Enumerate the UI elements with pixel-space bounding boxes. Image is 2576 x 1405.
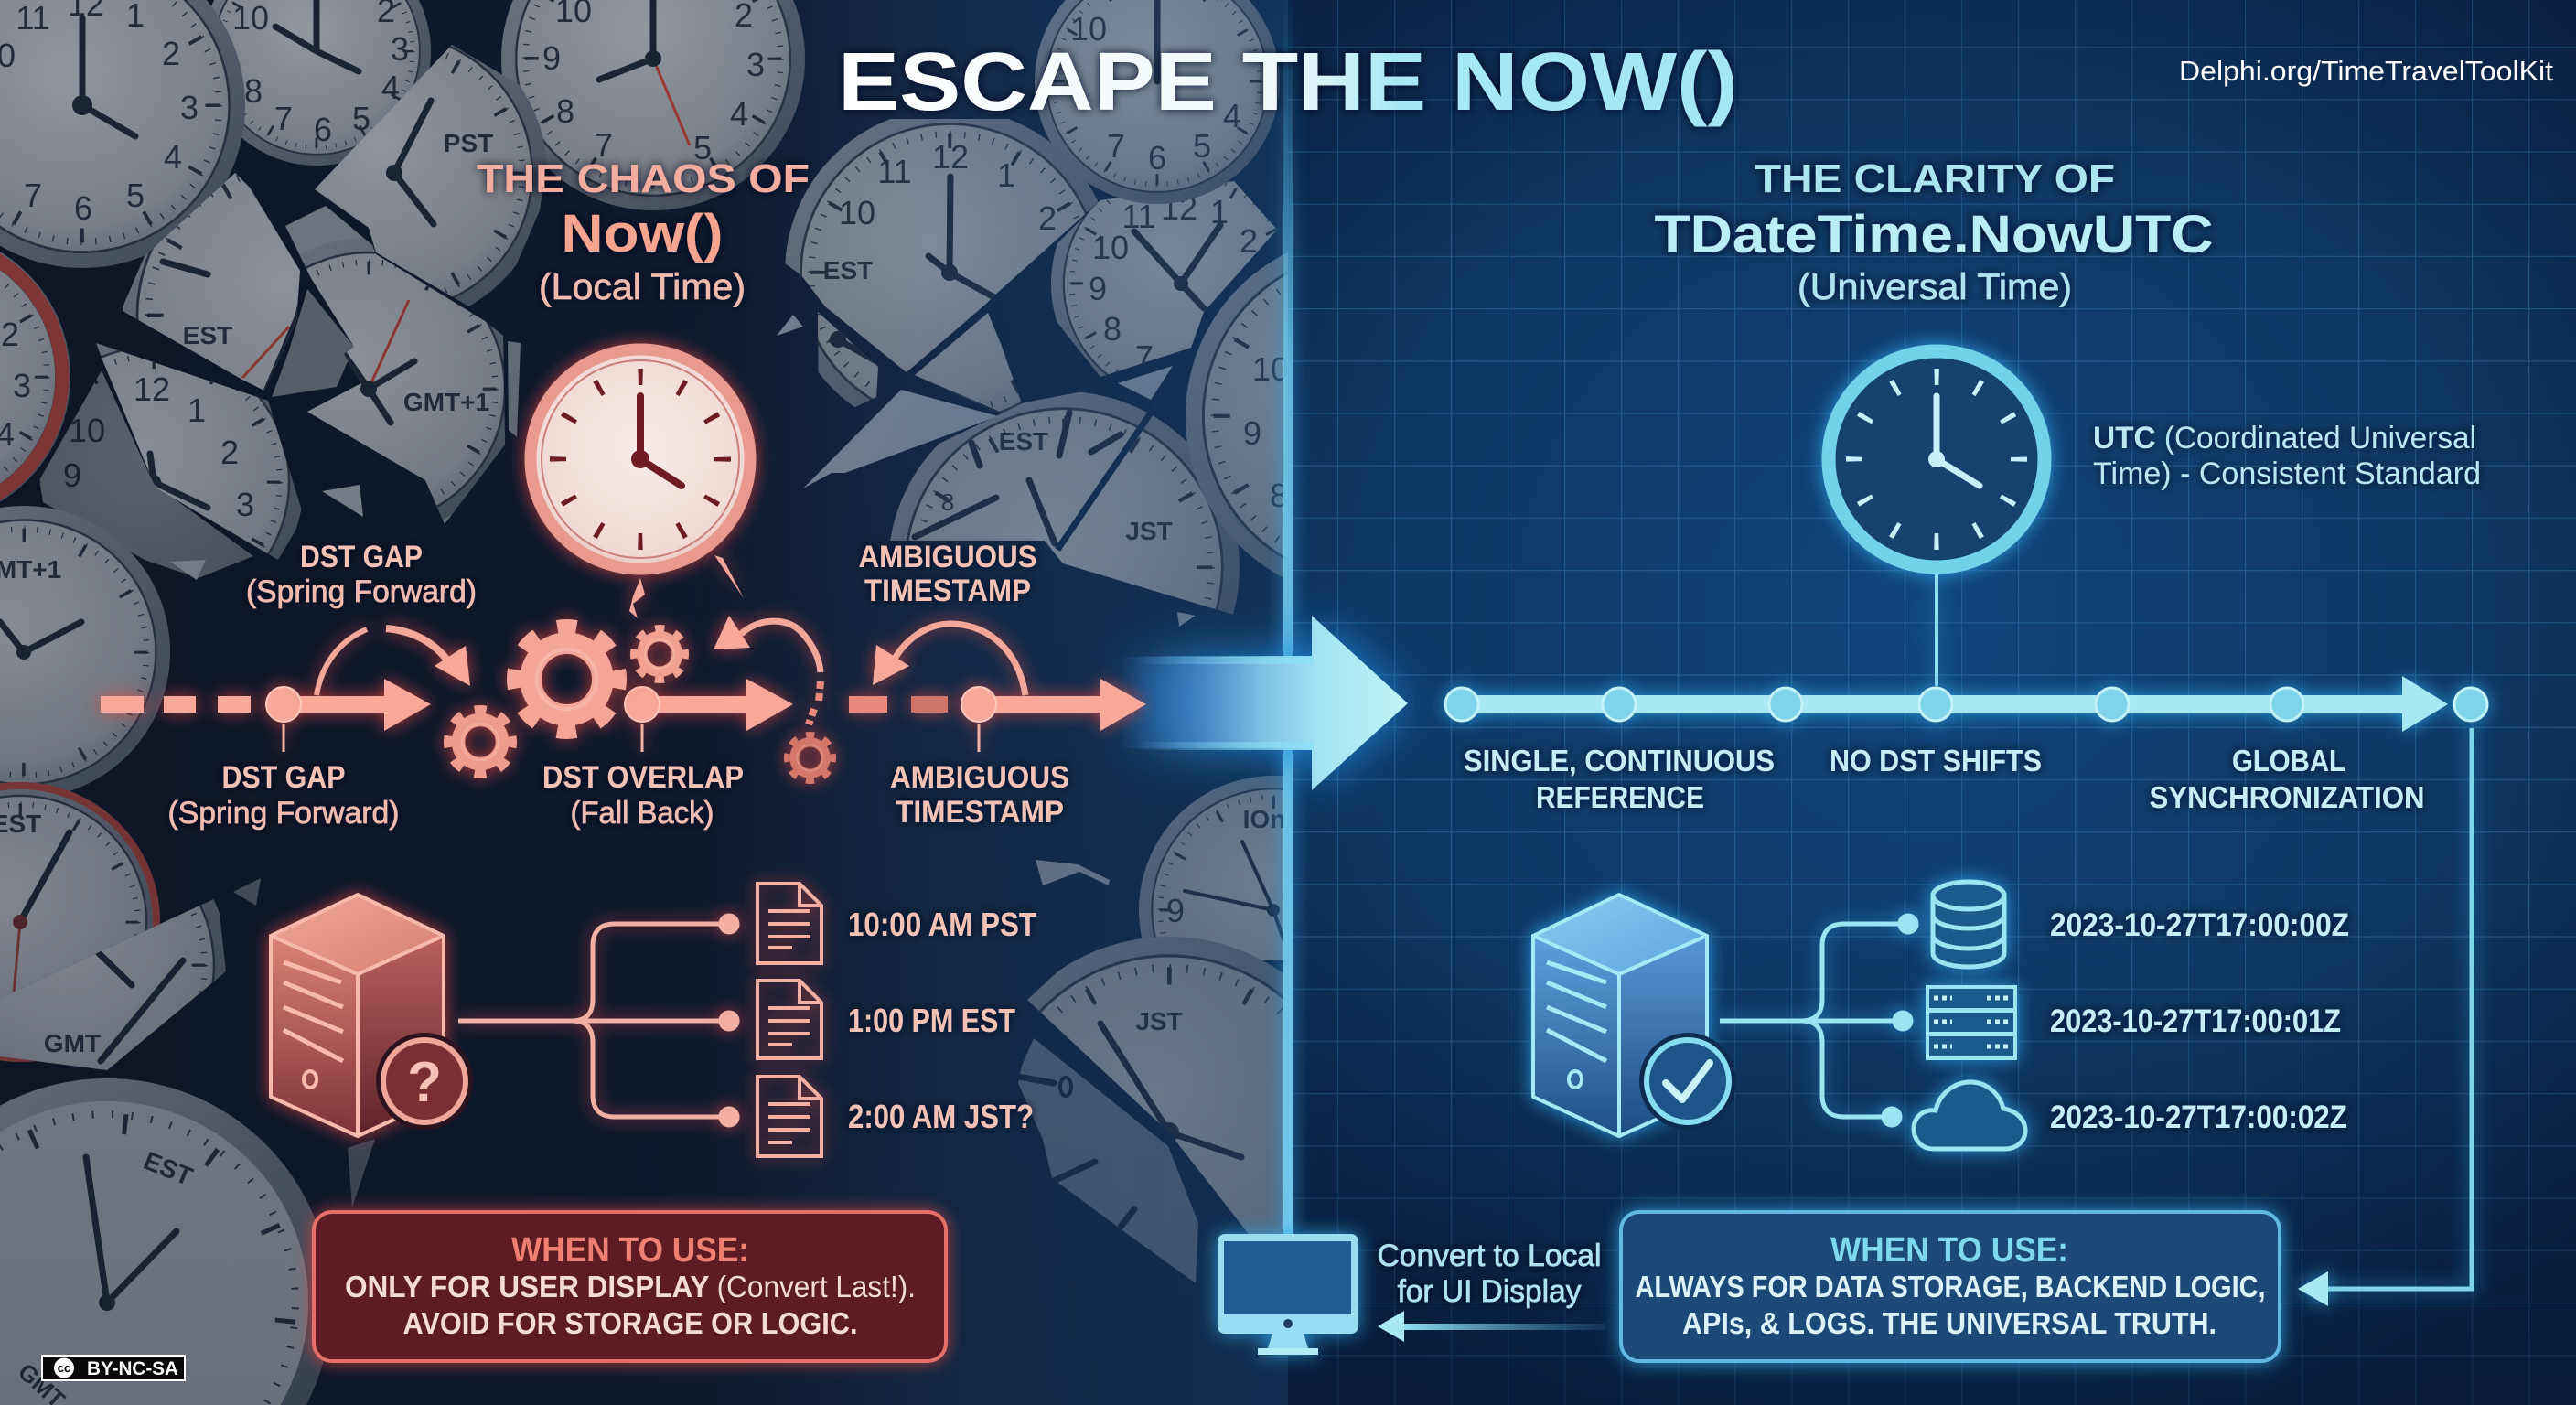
timeline stems	[284, 724, 979, 752]
label: ambiguous timestamp: AMBIGUOUS	[890, 760, 1069, 795]
shard: clock with 12	[96, 343, 302, 560]
shard: GMT+1 clock: GMT+1	[403, 388, 489, 416]
panel text line one right: ALWAYS FOR DATA STORAGE, BACKEND LOGIC,	[1636, 1270, 2265, 1303]
license badge	[42, 1356, 185, 1380]
icon: monitor	[1218, 1234, 1358, 1355]
clock: GMT+1 lower left	[0, 506, 170, 799]
small floating shards	[170, 485, 1196, 1207]
shard: small chip	[777, 315, 803, 336]
panel text line two right: APIs, & LOGS. THE UNIVERSAL TRUTH.	[1682, 1306, 2216, 1340]
shard: clock with 12: 12	[134, 370, 170, 408]
timeline arrow three	[979, 679, 1146, 731]
hop arrow one	[317, 628, 470, 695]
label: DST gap	[168, 760, 399, 831]
clock: large EST at top right: 12	[932, 138, 969, 176]
shard: lower dark piece of clock with 12	[39, 370, 253, 578]
timeline bar with arrow	[1462, 676, 2448, 732]
label: global synchronization	[2150, 744, 2424, 814]
icon: document three	[757, 1077, 821, 1156]
heading line: the clarity of: THE CLARITY OF	[1755, 156, 2115, 201]
label: single continuous reference: REFERENCE	[1536, 780, 1704, 814]
blue tone overlay	[0, 0, 1288, 1405]
shard: lower dark piece of clock with 12: 10	[69, 412, 105, 449]
clock: JST shard upper: IST	[1167, 1190, 1208, 1218]
clock: top right back: 4	[1223, 97, 1241, 134]
clock: top left large: 5	[126, 177, 145, 214]
label: single continuous reference: SINGLE, CONTINUOUS	[1464, 744, 1775, 778]
icon: blue clock	[1829, 351, 2045, 686]
vertical divider	[1283, 0, 1293, 1235]
clock: lower left large EST	[0, 1078, 331, 1405]
UTC caption	[2093, 421, 2481, 491]
background: right clarity panel	[1288, 0, 2576, 1405]
clock: top middle: 7	[595, 126, 613, 164]
connector: red server to documents	[458, 916, 737, 1125]
connector: blue server to stores	[1720, 916, 1916, 1125]
text: local timestamp PST: 10:00 AM PST	[848, 906, 1036, 943]
clock: far right cut by divider: 10	[1252, 350, 1289, 388]
label: DST gap: DST GAP	[221, 760, 346, 795]
clock: top left back: 8	[244, 72, 263, 110]
clock: JST shard lower	[1006, 1024, 1208, 1290]
shard: GMT+1 clock	[285, 206, 505, 524]
shard: right triangle	[785, 108, 1114, 437]
clock: far right cut by divider: 9	[1243, 414, 1261, 452]
shard: clock with 12: 1	[188, 391, 206, 429]
icon: cloud	[1914, 1082, 2025, 1149]
clock: top middle: 8	[556, 92, 574, 130]
label: no DST shifts: NO DST SHIFTS	[1830, 744, 2042, 778]
license badge: BY-NC-SA	[87, 1358, 178, 1379]
clock: top middle: 9	[542, 39, 561, 77]
clock: large EST at top right: EST	[823, 256, 873, 284]
icon: small gear lower	[448, 710, 512, 774]
text: convert to local	[1378, 1239, 1601, 1309]
clock: large EST at top right: 1	[997, 156, 1015, 194]
text: UTC timestamp 02: 2023-10-27T17:00:02Z	[2050, 1099, 2347, 1135]
clock: lower left red rim EST	[0, 782, 160, 1062]
clock: top left large: 7	[24, 177, 42, 214]
clock: top right back: 10	[1070, 10, 1107, 48]
clock: right lower back: IOn	[1243, 805, 1285, 833]
hop arrow two	[714, 616, 821, 724]
clock: upper right shard	[1051, 154, 1311, 413]
clock: large EST at top right: 10	[839, 194, 875, 231]
icon: document one	[757, 884, 821, 963]
clock: top left back	[202, 0, 431, 166]
clock: upper right shard: 1	[1210, 193, 1229, 231]
clock: top middle: 5	[693, 129, 712, 166]
clock: JST shard upper: JST	[1135, 1007, 1183, 1035]
clock: upper right shard: 11	[1122, 198, 1156, 235]
shard: GMT clock: GMT	[44, 1029, 101, 1057]
heading line: the chaos of: THE CHAOS OF	[477, 156, 810, 201]
label: DST overlap: DST OVERLAP	[542, 760, 744, 795]
clock: upper right shard: 8	[1103, 310, 1122, 348]
clock: top right back: 7	[1107, 127, 1125, 165]
broken clocks collage	[0, 0, 1550, 1405]
left heading	[477, 156, 810, 307]
clock: top right back: 6	[1148, 139, 1166, 177]
shard: small triangle	[1118, 366, 1173, 400]
shard: EST clock: EST	[183, 321, 232, 349]
clock: red rim left: 2	[1, 316, 19, 353]
big transition arrow	[1121, 616, 1408, 790]
arrow: to monitor	[1378, 1311, 1605, 1342]
heading line: TDateTime.NowUTC: TDateTime.NowUTC	[1654, 205, 2214, 264]
clock: lower left large EST: EST	[140, 1146, 197, 1191]
license badge: cc	[58, 1361, 70, 1375]
label: upper DST gap: (Spring Forward)	[246, 574, 477, 609]
timeline dashes right	[849, 696, 887, 713]
rim fragment: GMT+1 clock	[508, 341, 521, 437]
clock: right lower back: 9	[1166, 892, 1185, 929]
label: upper DST gap: DST GAP	[300, 540, 423, 574]
timeline arrow two	[642, 679, 793, 731]
shard: PST clock	[315, 45, 547, 306]
clear timeline	[1445, 676, 2487, 732]
icon: small gear right	[787, 735, 833, 781]
clock: top middle	[501, 0, 805, 210]
label: DST overlap	[542, 760, 744, 831]
clock: right lower back	[1139, 776, 1408, 1045]
clock: far right cut by divider: 8	[1270, 477, 1288, 514]
timeline arrow one	[284, 679, 431, 731]
panel: when to use left	[314, 1212, 946, 1361]
icon: large gear	[514, 627, 619, 732]
shard: EST JST clock: JST	[1125, 517, 1173, 545]
clock: JST shard upper	[973, 937, 1365, 1328]
clock: top left large: 3	[180, 89, 199, 126]
icon: small gear upper	[634, 628, 685, 680]
label: ambiguous timestamp	[890, 760, 1069, 830]
label: global synchronization: GLOBAL	[2232, 744, 2345, 778]
clock: red rim left: 3	[13, 367, 31, 404]
text: convert to local: Convert to Local	[1378, 1239, 1601, 1273]
heading line: Now(): Now()	[562, 204, 723, 263]
shard: GMT clock	[0, 814, 229, 1116]
clock: top right back	[1035, 0, 1280, 204]
clock: top left back: 6	[314, 111, 332, 148]
shard: lower dark piece of clock with 12: 9	[63, 456, 81, 494]
label: upper ambiguous timestamp	[858, 540, 1037, 608]
shard: EST clock	[123, 173, 300, 391]
panel: when to use right	[1621, 1212, 2280, 1361]
timeline nodes	[1445, 688, 2487, 721]
text: convert to local: for UI Display	[1398, 1274, 1581, 1309]
background: left chaos panel	[0, 0, 1288, 1405]
clock: top left large	[0, 0, 245, 268]
label: global synchronization: SYNCHRONIZATION	[2150, 780, 2424, 814]
UTC caption: UTC (Coordinated Universal	[2093, 421, 2476, 456]
arrow: timeline to when to use box	[2298, 728, 2472, 1306]
timeline node three	[961, 687, 996, 722]
right heading	[1654, 156, 2214, 307]
clock: top left back: 10	[232, 0, 269, 37]
text: local timestamp EST: 1:00 PM EST	[848, 1002, 1015, 1039]
clock: top left back: 5	[352, 100, 370, 137]
clock: red rim left	[0, 252, 70, 502]
timeline node one	[266, 687, 301, 722]
clock: large EST at top right	[785, 108, 1114, 437]
clock: top left large: 4	[164, 138, 182, 176]
clock: upper right shard: 10	[1092, 229, 1129, 266]
shard: EST JST clock: EST	[999, 427, 1048, 456]
clock: top right back: 5	[1193, 127, 1211, 165]
clock: top left large: 2	[162, 35, 180, 72]
shard: clock with 12: 3	[236, 486, 254, 523]
icon: red server with question mark: ?	[407, 1051, 442, 1114]
shard: EST JST clock	[888, 391, 1240, 743]
timeline dashes left	[101, 696, 251, 713]
clock: top middle: 3	[746, 46, 765, 83]
label: DST overlap: (Fall Back)	[571, 796, 714, 831]
panel text line two left: AVOID FOR STORAGE OR LOGIC.	[402, 1306, 858, 1340]
icon: database	[1933, 882, 2004, 967]
clock: top left back: 3	[391, 30, 409, 68]
hop arrow three	[873, 624, 1025, 695]
chaotic timeline	[101, 616, 1146, 752]
clock: top left large: 11	[16, 0, 50, 37]
icon: server rack	[1927, 987, 2015, 1058]
clock: top left large: 6	[74, 189, 92, 227]
heading line: universal time: (Universal Time)	[1798, 267, 2072, 307]
crack: EST JST clock	[1057, 403, 1157, 550]
shard: EST JST clock: 8	[941, 488, 954, 516]
clock: upper right shard: 12	[1161, 189, 1197, 227]
panel heading right: WHEN TO USE:	[1830, 1231, 2068, 1270]
label: upper DST gap	[246, 540, 477, 609]
clock: upper right shard: 9	[1089, 270, 1107, 307]
label: upper ambiguous timestamp: TIMESTAMP	[864, 574, 1031, 608]
label: ambiguous timestamp: TIMESTAMP	[896, 795, 1064, 830]
icon: document two	[757, 981, 821, 1058]
label: DST gap: (Spring Forward)	[168, 796, 399, 831]
heading line: local time: (Local Time)	[539, 267, 746, 307]
text: UTC timestamp 00: 2023-10-27T17:00:00Z	[2050, 907, 2349, 943]
clock: upper right shard: 7	[1135, 338, 1154, 376]
clock: top left back: 4	[381, 69, 400, 106]
main title: ESCAPE THE NOW()	[838, 37, 1738, 128]
clock: upper right shard: 2	[1240, 222, 1258, 260]
shard: clock with 12: 2	[220, 434, 239, 471]
UTC caption: Time) - Consistent Standard	[2093, 456, 2481, 491]
icon: red server with question mark	[271, 895, 473, 1136]
icon: pink cracked clock	[531, 349, 750, 618]
text: UTC timestamp 01: 2023-10-27T17:00:01Z	[2050, 1003, 2341, 1039]
clock: large EST at top right: 2	[1038, 199, 1057, 237]
panel text line one left: ONLY FOR USER DISPLAY (Convert Last!).	[345, 1270, 916, 1303]
icon: blue server with check	[1533, 895, 1736, 1136]
label: upper ambiguous timestamp: AMBIGUOUS	[858, 540, 1037, 574]
shard: left triangle	[785, 108, 1114, 437]
clock: far right cut by divider	[1186, 234, 1550, 598]
clock: large EST at top right: 11	[877, 153, 912, 190]
shard: lower wedge	[803, 390, 998, 488]
text: local timestamp JST: 2:00 AM JST?	[848, 1098, 1034, 1135]
shard: PST clock: PST	[444, 129, 493, 157]
shard: dark middle piece	[272, 289, 354, 397]
clock: top left back: 7	[274, 100, 293, 137]
timeline node two	[625, 687, 660, 722]
panel heading left: WHEN TO USE:	[511, 1231, 749, 1270]
clock: top middle: 4	[730, 95, 748, 133]
label: single continuous reference	[1464, 744, 1775, 814]
source url: Delphi.org/TimeTravelToolKit	[2179, 55, 2553, 87]
